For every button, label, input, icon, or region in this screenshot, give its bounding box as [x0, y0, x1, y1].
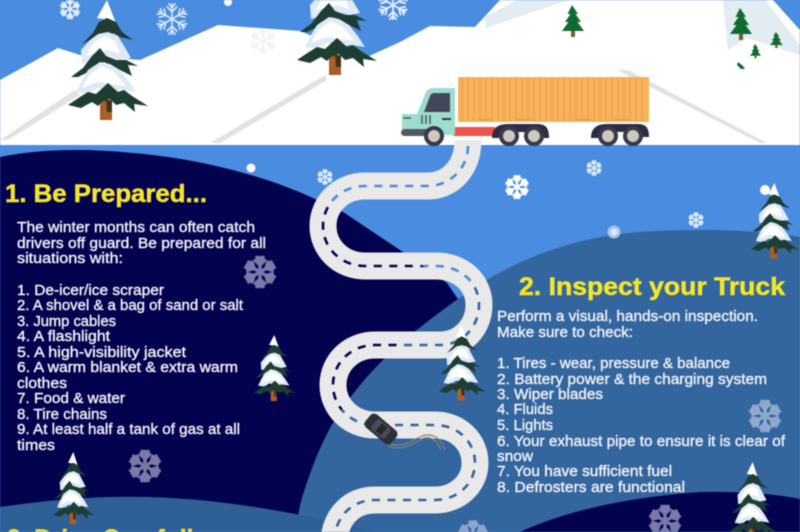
text block: be prepared: 7. Food & water: [17, 390, 125, 407]
text block: be prepared: clothes: [17, 375, 67, 392]
text block: inspect your truck: 3. Wiper blades: [497, 386, 603, 403]
text block: be prepared: drivers off guard. Be prepared for all: [17, 235, 266, 252]
heading 2: 2. Inspect your Truck: [519, 273, 785, 301]
bottom right navy hill: [520, 492, 800, 532]
icon: skidding car: [363, 412, 399, 446]
text block: be prepared: The winter months can often catch: [17, 219, 255, 236]
heading 1: 1. Be Prepared...: [5, 180, 207, 208]
text block: inspect your truck: Perform a visual, hands-on inspection.: [497, 308, 758, 325]
bottom left hill: [0, 497, 375, 532]
text block: inspect your truck: Make sure to check:: [497, 324, 633, 341]
snowflakes on sky: [60, 0, 770, 238]
cab window: [424, 93, 450, 112]
text block: inspect your truck: 5. Lights: [497, 417, 553, 434]
text block: be prepared: 3. Jump cables: [17, 313, 116, 330]
text block: be prepared: [17, 219, 266, 454]
panel: medium blue hill: [297, 230, 800, 532]
chassis: [453, 127, 495, 136]
container trailer: [458, 77, 649, 122]
trees: large: [68, 0, 377, 120]
skid tracks: [388, 435, 445, 450]
text block: be prepared: 2. A shovel & a bag of sand or salt: [17, 297, 244, 314]
text block: be prepared: 5. A high-visibility jacket: [17, 344, 187, 361]
panel: dark navy hill: [0, 150, 458, 532]
wheels: [426, 128, 641, 144]
text block: inspect your truck: 1. Tires - wear, pressure & balance: [497, 355, 730, 372]
text block: be prepared: situations with:: [17, 250, 123, 267]
text block: be prepared: 6. A warm blanket & extra warm: [17, 359, 238, 376]
text block: inspect your truck: snow: [497, 448, 533, 465]
text block: inspect your truck: [497, 308, 786, 496]
text block: be prepared: 1. De-icer/ice scraper: [17, 282, 164, 299]
text block: be prepared: 9. At least half a tank of gas at all: [17, 421, 240, 438]
snowy mountains: [0, 0, 800, 145]
distant pine trees: [562, 5, 783, 69]
snowflakes on hills: [130, 257, 780, 532]
text block: inspect your truck: 7. You have sufficient fuel: [497, 463, 672, 480]
text block: inspect your truck: 8. Defrosters are functional: [497, 479, 685, 496]
cab: [402, 88, 455, 135]
text block: be prepared: times: [17, 437, 55, 454]
text block: inspect your truck: 4. Fluids: [497, 401, 553, 418]
text block: be prepared: 4. A flashlight: [17, 328, 111, 345]
winding road: [323, 140, 479, 532]
trees: small: [53, 183, 799, 532]
text block: inspect your truck: 6. Your exhaust pipe to ensure it is clear of: [497, 433, 786, 450]
text block: inspect your truck: 2. Battery power & the charging system: [497, 371, 767, 388]
text block: be prepared: 8. Tire chains: [17, 406, 107, 423]
icon: truck: [401, 77, 649, 144]
